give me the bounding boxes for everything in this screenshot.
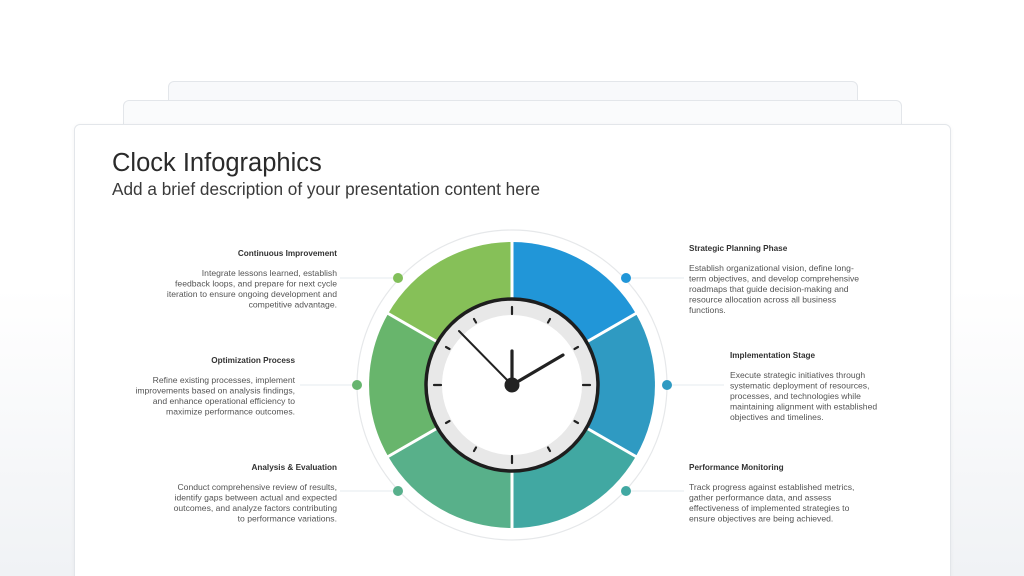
clock face: [426, 299, 598, 471]
text: strategic planning phase: resource allocation across all business: [689, 294, 836, 304]
text: performance monitoring: gather performance data, and assess: [689, 492, 831, 502]
connector dots: [352, 273, 672, 496]
text: strategic planning phase: Strategic Planning Phase: [689, 244, 788, 253]
text: performance monitoring: Performance Monitoring: [689, 463, 784, 472]
text: performance monitoring: effectiveness of implemented strategies to: [689, 503, 850, 513]
segment: strategic planning: [512, 242, 636, 385]
segment: continuous improvement: [388, 242, 512, 385]
text: analysis & evaluation: to performance variations.: [238, 514, 337, 524]
text: optimization process: Refine existing processes, implement: [153, 375, 296, 385]
text: implementation stage: objectives and timelines.: [730, 412, 824, 422]
text: analysis & evaluation: Conduct comprehensive review of results,: [177, 482, 337, 492]
text: optimization process: maximize performance outcomes.: [166, 406, 295, 416]
text: implementation stage: maintaining alignment with established: [730, 402, 877, 412]
title: Clock Infographics: [112, 149, 322, 177]
text: optimization process: [135, 356, 296, 416]
text: continuous improvement: Integrate lessons learned, establish: [202, 268, 337, 278]
text: strategic planning phase: [689, 244, 859, 315]
text: optimization process: and enhance operational efficiency to: [153, 396, 295, 406]
text: implementation stage: processes, and technologies while: [730, 391, 861, 401]
text: optimization process: Optimization Process: [211, 356, 295, 365]
segment: analysis: [388, 385, 512, 528]
clock ring: [357, 230, 667, 540]
text: strategic planning phase: term objectives, and develop comprehensive: [689, 274, 859, 284]
text: analysis & evaluation: identify gaps between actual and expected: [175, 492, 337, 502]
text: analysis & evaluation: outcomes, and analyze factors contributing: [174, 503, 337, 513]
segment: optimization: [369, 314, 512, 456]
text: implementation stage: Implementation Stage: [730, 351, 816, 360]
text: performance monitoring: Track progress against established metrics,: [689, 482, 854, 492]
text: performance monitoring: ensure objectives are being achieved.: [689, 514, 833, 524]
back card 1: [123, 100, 902, 162]
back card 2: [168, 81, 858, 143]
segment: performance monitoring: [512, 385, 636, 528]
text: optimization process: improvements based on analysis findings,: [135, 386, 295, 396]
text: continuous improvement: feedback loops, and prepare for next cycle: [175, 278, 337, 288]
text: strategic planning phase: functions.: [689, 305, 726, 315]
text: analysis & evaluation: [174, 463, 337, 524]
connector lines: [300, 278, 724, 491]
text: continuous improvement: iteration to ensure ongoing development and: [167, 289, 337, 299]
segment: implementation: [512, 314, 655, 456]
text: performance monitoring: [689, 463, 854, 524]
clock hands: [459, 331, 563, 385]
text: strategic planning phase: roadmaps that guide decision-making and: [689, 284, 849, 294]
text: analysis & evaluation: Analysis & Evaluation: [251, 463, 337, 472]
text: continuous improvement: [167, 249, 337, 310]
text: implementation stage: [730, 351, 877, 422]
text: implementation stage: systematic deployment of resources,: [730, 380, 869, 390]
text: strategic planning phase: Establish organizational vision, define long-: [689, 263, 854, 273]
subtitle: Add a brief description of your presentation content here: [112, 179, 540, 199]
text: continuous improvement: Continuous Improvement: [238, 249, 337, 258]
main card: [74, 124, 951, 576]
text: implementation stage: Execute strategic initiatives through: [730, 370, 865, 380]
text: continuous improvement: competitive advantage.: [249, 300, 337, 310]
